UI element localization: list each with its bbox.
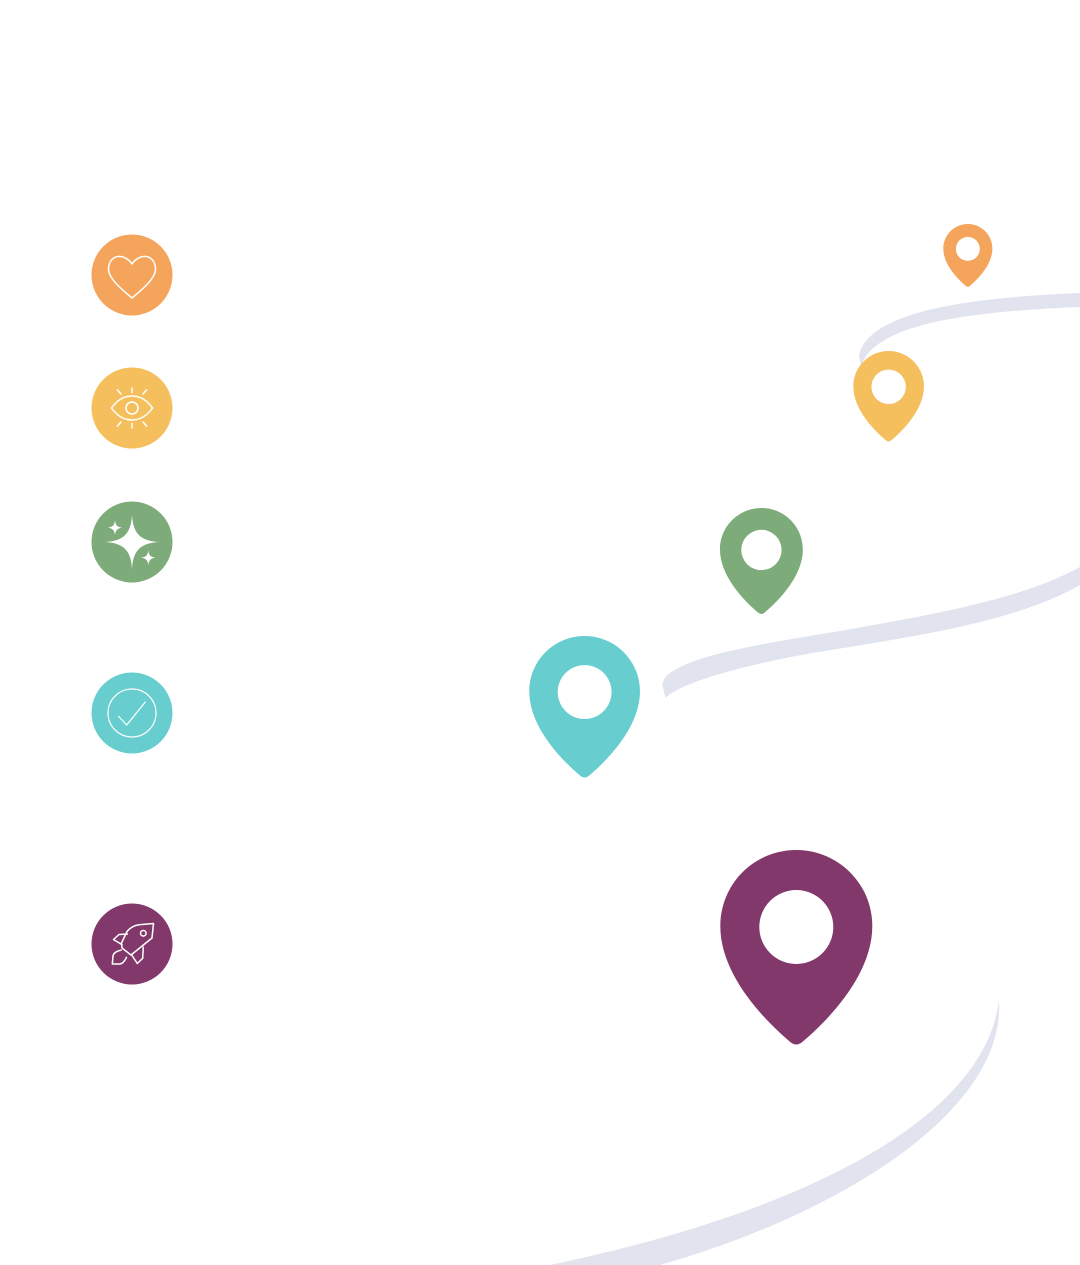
map pin: purple bbox=[720, 850, 872, 1044]
icon: heart badge bbox=[92, 234, 172, 316]
icon: eye badge bbox=[92, 368, 172, 448]
road: middle ribbon bbox=[662, 567, 1080, 698]
road: bottom ribbon bbox=[550, 1000, 999, 1265]
map pin: teal bbox=[529, 636, 640, 778]
map pin: green bbox=[720, 508, 803, 614]
road: top ribbon bbox=[859, 293, 1080, 366]
icon: rocket badge bbox=[92, 904, 172, 984]
icon: sparkle badge bbox=[92, 502, 172, 582]
map pin: orange bbox=[943, 224, 992, 287]
icon: check badge bbox=[92, 672, 172, 754]
map pin: yellow bbox=[853, 351, 924, 441]
